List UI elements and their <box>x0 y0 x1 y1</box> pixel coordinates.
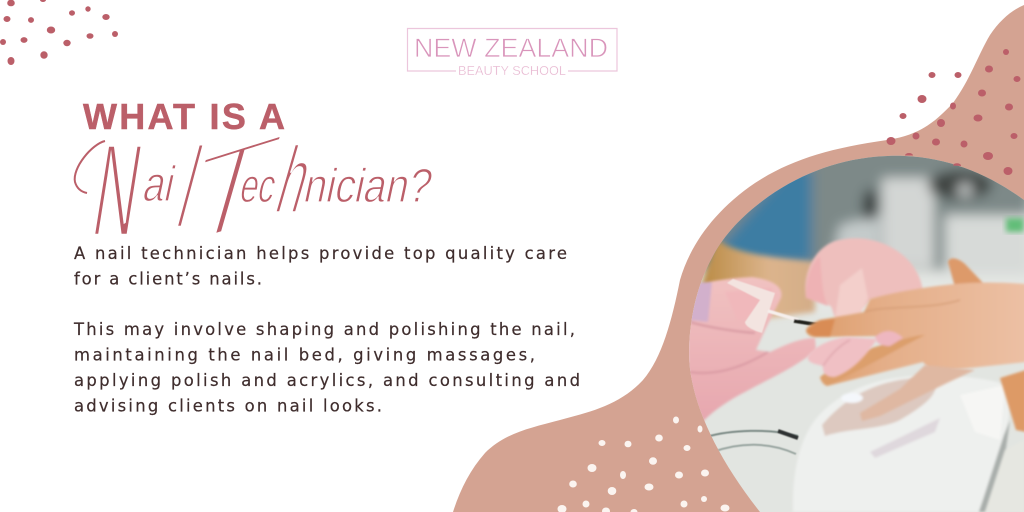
paragraph two: applying polish and acrylics, and consulting and <box>74 371 580 390</box>
paragraph one: for a client’s nails. <box>74 270 262 288</box>
dots: top right <box>886 49 1020 175</box>
dots: bottom white <box>558 416 730 512</box>
paragraph one: A nail technician helps provide top quality care <box>74 244 567 263</box>
heading: nail technician script: N <box>84 117 151 265</box>
orange edge of hand <box>1000 370 1024 432</box>
client hand <box>806 258 1024 386</box>
cables <box>706 431 798 454</box>
reflected finger in lamp <box>860 365 975 421</box>
left gloved hand <box>688 277 816 425</box>
heading: nail technician script: ec <box>236 159 281 213</box>
dots: top left <box>0 0 118 65</box>
upper gloved hand <box>805 238 923 320</box>
logo <box>408 28 617 78</box>
paragraph two <box>73 320 580 416</box>
heading: nail technician script: nician? <box>300 159 437 213</box>
photo background <box>694 156 1024 306</box>
heading: nail technician script <box>75 102 437 278</box>
heading: nail technician script: ai <box>139 156 181 212</box>
tan arm behind <box>700 238 815 318</box>
paragraph two: This may involve shaping and polishing the nail, <box>73 320 575 339</box>
polish bottle and brush <box>727 279 819 333</box>
curing lamp <box>793 375 1024 512</box>
heading: nail technician script: h <box>266 126 324 234</box>
logo: BEAUTY SCHOOL <box>458 63 566 78</box>
background blob <box>453 5 1024 512</box>
paragraph two: advising clients on nail looks. <box>74 396 382 416</box>
pink fingers of glove <box>808 337 877 377</box>
heading: nail technician script: l <box>166 122 213 253</box>
heading: what is a: WHAT IS A <box>83 96 285 137</box>
heading: nail technician script: T <box>165 102 297 278</box>
body text <box>73 244 580 416</box>
paragraph two: maintaining the nail bed, giving massages, <box>74 346 535 364</box>
paragraph one <box>74 244 567 288</box>
logo: NEW ZEALAND <box>414 33 608 63</box>
photo: nail polish being applied <box>680 140 1024 512</box>
